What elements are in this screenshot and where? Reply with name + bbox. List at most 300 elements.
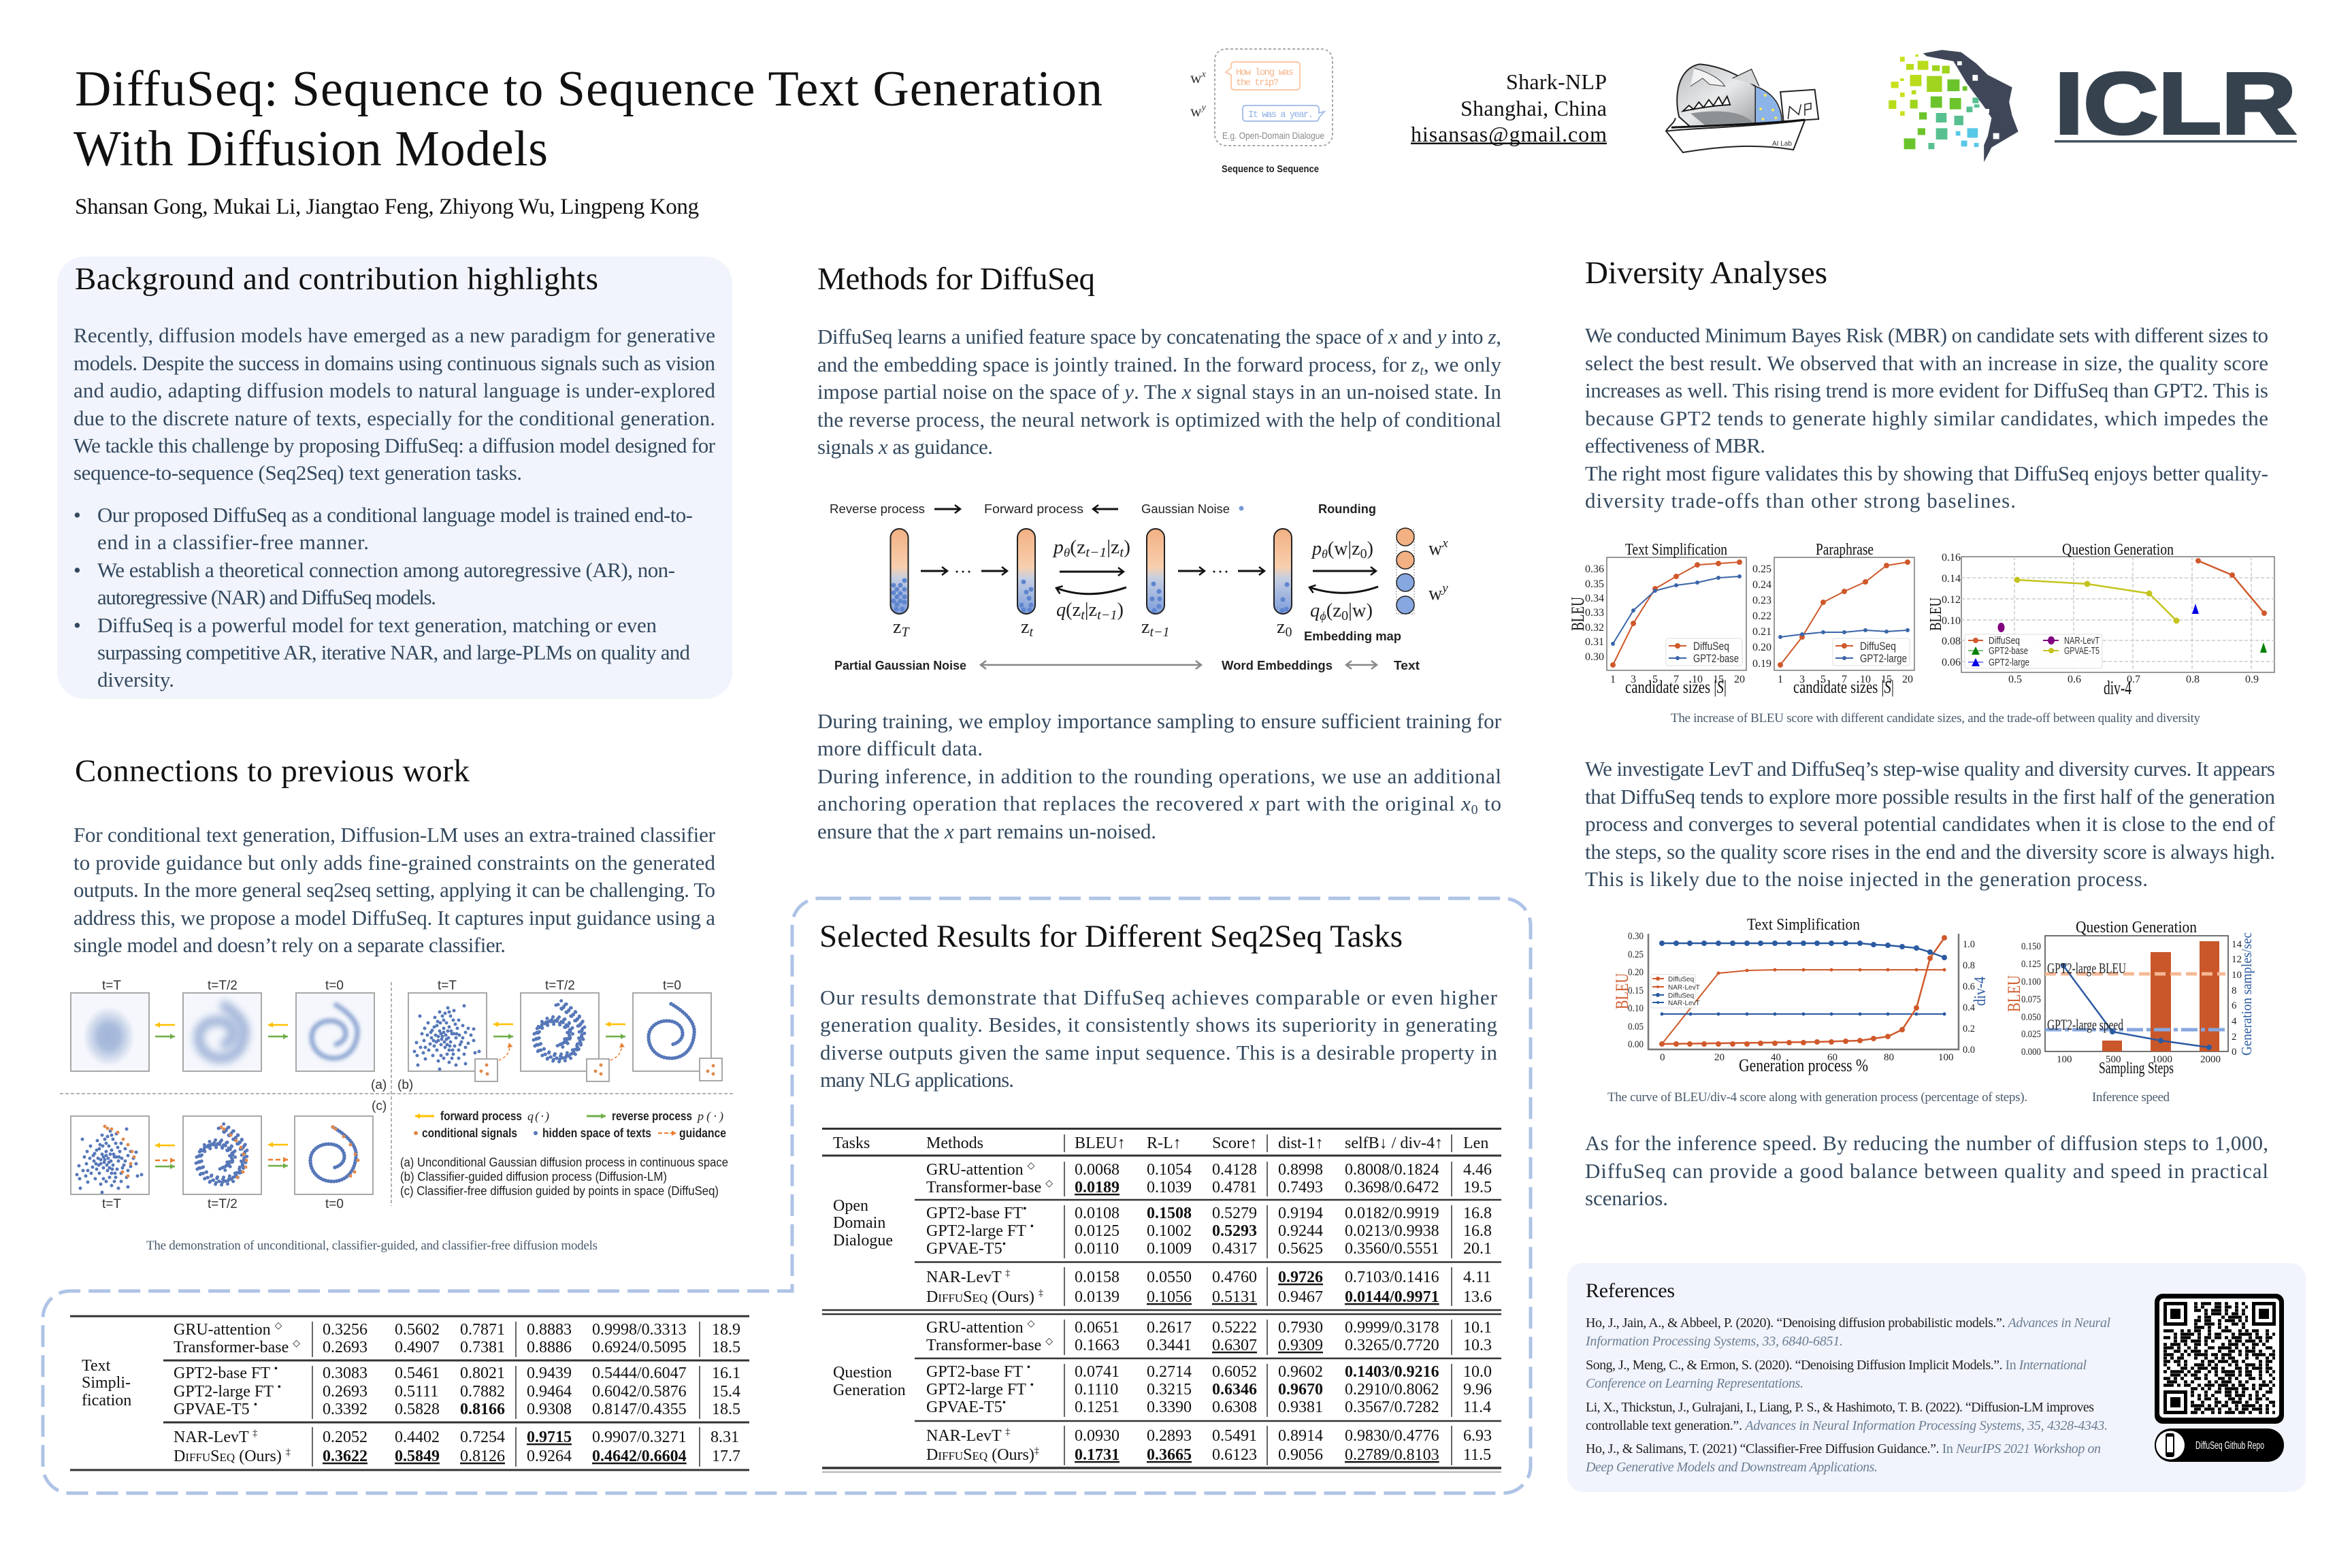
math labels: t−1 — [1097, 608, 1117, 623]
affiliation and contact: Shark-NLP — [1506, 69, 1607, 94]
table: text simplification: 0.9998/0.3313 — [592, 1321, 687, 1339]
stage labels: t=T/2 — [208, 979, 238, 993]
table header: Tasks — [833, 1134, 870, 1152]
table: text simplification: 0.9464 — [527, 1383, 572, 1401]
task: question generation: 0.1251 — [1075, 1399, 1120, 1416]
reference list: Ho, J., & Salimans, T. (2021) “Classifier-Free Diffusion Guidance.”. In NeurIPS 2021 Workshop on — [1586, 1441, 2101, 1456]
table: text simplification: 0.4642/0.6604 — [592, 1448, 687, 1465]
task: question generation: GRU-attention — [926, 1319, 1024, 1337]
figure caption: The demonstration of unconditional, classifier-guided, and classifier-free diffusion models — [146, 1239, 598, 1253]
task: open domain dialogue: Domain — [833, 1214, 885, 1232]
heading: diversity analyses: Diversity Analyses — [1585, 255, 1827, 291]
math labels: |z — [1085, 600, 1097, 621]
stage labels: (b) — [397, 1078, 413, 1092]
heading: selected results: Selected Results for Different Seq2Seq Tasks — [819, 919, 1403, 954]
table header: BLEU↑ — [1075, 1134, 1126, 1152]
chart: inference speed: 8 — [2232, 985, 2236, 996]
caption: candidate size figure: The increase of BLEU score with different candidate sizes, and the trade-off between quality and diversity — [1671, 711, 2201, 725]
chart: inference speed: 0 — [2232, 1047, 2236, 1058]
math labels: w — [1428, 538, 1442, 559]
text block: step-wise curves: the steps, so the quality score rises in the end and the diversity score is always high. — [1585, 840, 2275, 864]
chart: generation process curves: Text Simplification — [1747, 916, 1860, 934]
title: DiffuSeq: Sequence to Sequence Text Generation — [75, 61, 1102, 117]
chart: inference speed: 0.100 — [2021, 977, 2041, 987]
text block: MBR: effectiveness of MBR. — [1585, 434, 1765, 457]
chart: question generation trade-off: 0.5 — [2008, 674, 2022, 685]
task: open domain dialogue: 0.0125 — [1075, 1222, 1120, 1240]
authors: Shansan Gong, Mukai Li, Jiangtao Feng, Zhiyong Wu, Lingpeng Kong — [75, 195, 699, 219]
chart: question generation trade-off: 0.16 — [1942, 552, 1961, 564]
chart: inference speed: 14 — [2232, 939, 2242, 950]
figure: diffusion demonstration — [60, 979, 735, 1253]
table header: Len — [1463, 1134, 1488, 1152]
chart: generation process curves: NAR-LevT — [1668, 984, 1700, 992]
table: text simplification: 0.5111 — [395, 1383, 438, 1401]
chart: text simplification candidate sizes: 20 — [1734, 674, 1745, 685]
chart: inference speed: 0.150 — [2021, 941, 2041, 952]
task: question generation: 0.2910/0.8062 — [1345, 1381, 1439, 1399]
task: open domain dialogue: NAR-LevT — [926, 1269, 1001, 1286]
text block: step-wise curves: We investigate LevT and DiffuSeq’s step-wise quality and diversity curves. It appears — [1585, 757, 2275, 781]
task: question generation: 0.6123 — [1212, 1446, 1257, 1464]
icon: sequence to sequence card: E.g. Open-Domain Dialogue — [1222, 130, 1324, 141]
chart: generation process curves: div-4 — [1972, 977, 1989, 1006]
chart: paraphrase candidate sizes: 0.24 — [1752, 579, 1771, 591]
task: question generation: 0.5491 — [1212, 1427, 1257, 1445]
table: text simplification: 0.4907 — [395, 1339, 440, 1356]
logo: shark NLP — [1666, 64, 1818, 152]
captions: curve figures: Inference speed — [2092, 1090, 2170, 1105]
task: open domain dialogue: 0.0182/0.9919 — [1345, 1205, 1439, 1222]
chart: inference speed: 100 — [2057, 1054, 2072, 1065]
chart: paraphrase candidate sizes: 3 — [1799, 674, 1805, 685]
noise dots — [894, 581, 1287, 610]
task: open domain dialogue: Transformer-base — [926, 1179, 1041, 1196]
math labels: 0 — [1360, 546, 1367, 561]
task: question generation: 0.0741 — [1075, 1363, 1120, 1381]
row a: gaussian diffusion images — [71, 993, 374, 1071]
task: question generation: 11.4 — [1463, 1399, 1491, 1416]
chart: paraphrase candidate sizes: DiffuSeq — [1860, 640, 1896, 653]
figure legend — [400, 1109, 728, 1198]
chart: text simplification candidate sizes: DiffuSeq — [1693, 640, 1729, 653]
task: open domain dialogue: 0.1039 — [1147, 1179, 1192, 1196]
chart: question generation trade-off: GPVAE-T5 — [2064, 645, 2100, 657]
math labels: t — [1081, 608, 1085, 623]
task: question generation: 0.9381 — [1278, 1399, 1323, 1416]
heading: background: Background and contribution highlights — [75, 261, 598, 297]
chart: text simplification candidate sizes: 0.30 — [1585, 651, 1604, 663]
text block: background paragraph: Recently, diffusion models have emerged as a new paradigm for generative — [74, 323, 715, 347]
chart: question generation trade-off: 0.12 — [1942, 594, 1961, 606]
affiliation and contact: Shanghai, China — [1460, 96, 1607, 120]
chart: generation process curves: 40 — [1771, 1052, 1781, 1063]
divider lines — [60, 982, 735, 1206]
chart: paraphrase candidate sizes: 20 — [1902, 674, 1913, 685]
icon: sequence to sequence card: the trip? — [1236, 78, 1279, 88]
text block: MBR: The right most figure validates this by showing that DiffuSeq enjoys better quality- — [1585, 461, 2268, 485]
task: question generation: NAR-LevT — [926, 1427, 1001, 1445]
icon: sequence to sequence card: How long was — [1236, 67, 1294, 78]
math labels: p — [1052, 537, 1064, 558]
task: open domain dialogue: 0.8008/0.1824 — [1345, 1161, 1439, 1179]
text block: inference speed — [1585, 1131, 2268, 1210]
task: open domain dialogue: 19.5 — [1463, 1179, 1492, 1196]
text block: connections paragraph: single model and doesn’t rely on a separate classifier. — [74, 933, 506, 957]
math labels: t — [1120, 545, 1124, 560]
stage labels: t=T — [102, 1197, 121, 1211]
task: open domain dialogue: DiffuSeq (Ours) — [926, 1288, 1034, 1306]
table: text simplification: 0.9907/0.3271 — [592, 1428, 687, 1446]
task: question generation: 0.3567/0.7282 — [1345, 1399, 1439, 1416]
table: text simplification: • — [274, 1363, 278, 1375]
math labels: 0 — [1341, 608, 1348, 623]
captions: curve figures: The curve of BLEU/div-4 score along with generation process (percentage of steps). — [1607, 1090, 2027, 1105]
text block: background paragraph: due to the discrete nature of texts, especially for the conditional generation. — [74, 406, 715, 430]
stage labels: t=T — [102, 979, 121, 993]
chart: generation process curves: 0.6 — [1963, 981, 1975, 992]
table: text simplification: • — [254, 1399, 257, 1411]
chart: generation process curves: DiffuSeq — [1668, 992, 1694, 1000]
task: question generation: 0.1110 — [1075, 1381, 1118, 1399]
table: text simplification — [70, 1316, 749, 1470]
text block: background paragraph: and audio, adapting diffusion models to natural language is under-explored — [74, 378, 716, 402]
task: question generation: DiffuSeq (Ours) — [926, 1446, 1034, 1464]
chart: inference speed: GPT2-large speed — [2047, 1016, 2123, 1033]
task: open domain dialogue: 0.0108 — [1075, 1205, 1120, 1222]
text block: contribution bullets: We establish a theoretical connection among autoregressive (AR), non- — [97, 558, 675, 582]
chart: inference speed: 0.000 — [2021, 1047, 2041, 1058]
heading: references: References — [1586, 1279, 1675, 1302]
text block: results: Our results demonstrate that DiffuSeq achieves comparable or even higher — [820, 985, 1498, 1009]
chart: question generation trade-off: NAR-LevT — [2064, 635, 2100, 647]
table: text simplification: 0.3256 — [323, 1321, 368, 1339]
chart: text simplification candidate sizes: 7 — [1673, 674, 1679, 685]
text block: contribution bullets: diversity. — [97, 668, 174, 691]
task: open domain dialogue: 0.5279 — [1212, 1205, 1257, 1222]
table: text simplification: 0.4402 — [395, 1428, 440, 1446]
table: text simplification: 0.7254 — [460, 1428, 505, 1446]
stage labels: t=0 — [325, 1197, 344, 1211]
task: open domain dialogue: • — [1002, 1239, 1006, 1250]
reference list — [1585, 1316, 2110, 1475]
task: question generation: 0.0651 — [1075, 1319, 1120, 1337]
table header: Methods — [926, 1134, 983, 1152]
text block: methods intro: , we only — [1424, 353, 1501, 376]
figure legend: (b) Classifier-guided diffusion process (Diffusion-LM) — [400, 1170, 667, 1183]
text block: connections paragraph: to provide guidance but only adds fine-grained constraints on the generated — [74, 851, 716, 875]
text block: results: diverse outputs given the same input sequence. This is a desirable property in — [820, 1041, 1497, 1064]
task: open domain dialogue: 0.0110 — [1075, 1240, 1119, 1258]
button: DiffuSeq GitHub repo: DiffuSeq Github Repo — [2195, 1440, 2264, 1452]
math labels: z — [1277, 617, 1285, 638]
text block: inference speed: DiffuSeq can provide a good balance between quality and speed in practical — [1585, 1159, 2268, 1183]
task: question generation: 0.2714 — [1147, 1363, 1192, 1381]
task: open domain dialogue: 13.6 — [1463, 1288, 1492, 1306]
chart: paraphrase candidate sizes: 0.21 — [1752, 626, 1771, 638]
chart: inference speed: 4 — [2232, 1016, 2237, 1027]
table: text simplification: 0.5461 — [395, 1365, 440, 1382]
task: open domain dialogue: 0.9244 — [1278, 1222, 1323, 1240]
tubes — [890, 529, 1292, 614]
table: text simplification: 0.9439 — [527, 1365, 572, 1382]
chart: generation process curves: 80 — [1884, 1052, 1894, 1063]
figure legend: (c) Classifier-free diffusion guided by points in space (DiffuSeq) — [400, 1184, 719, 1198]
chart: inference speed: BLEU — [2004, 975, 2024, 1012]
table: text simplification: ◇ — [275, 1321, 282, 1331]
text block: background paragraph: models. Despite the success in domains using continuous signals such as vision — [74, 351, 716, 375]
task: open domain dialogue: 0.8998 — [1278, 1161, 1323, 1179]
task: open domain dialogue: ‡ — [1005, 1269, 1010, 1279]
table: text simplification: 18.5 — [712, 1401, 740, 1418]
table: main results — [822, 1128, 1501, 1472]
text block: contribution bullets: • — [74, 558, 81, 582]
task: question generation: 0.9670 — [1278, 1381, 1323, 1399]
table: text simplification: Simpli- — [82, 1374, 131, 1392]
row c: classifier-free scatter — [71, 1116, 373, 1194]
chart: generation process curves: 0 — [1660, 1052, 1665, 1063]
math labels: θ — [1322, 547, 1328, 561]
logo: ICLR: ICLR — [2055, 55, 2296, 152]
stage labels: (a) — [371, 1078, 387, 1092]
table: text simplification: 0.8883 — [527, 1321, 572, 1339]
chart: paraphrase candidate sizes: 0.22 — [1752, 610, 1771, 622]
title: With Diffusion Models — [74, 121, 548, 177]
chart: question generation trade-off: 0.7 — [2127, 674, 2140, 685]
task: open domain dialogue: 0.0213/0.9938 — [1345, 1222, 1439, 1240]
math labels: p — [1311, 538, 1322, 559]
task: question generation: 10.1 — [1463, 1319, 1492, 1337]
text block: background paragraph: sequence-to-sequence (Seq2Seq) text generation tasks. — [74, 461, 522, 485]
chart: text simplification candidate sizes: Text Simplification — [1625, 541, 1727, 559]
panel: references — [1567, 1263, 2306, 1492]
table header — [833, 1134, 1488, 1152]
text block: training and inference — [817, 709, 1502, 843]
logo: ICLR — [1889, 50, 2297, 162]
chart: inference speed: 10 — [2232, 970, 2242, 981]
table: text simplification: 8.31 — [710, 1428, 739, 1446]
table: text simplification: 0.7381 — [460, 1339, 505, 1356]
text block: contribution bullets: • — [74, 613, 81, 637]
table header: selfB↓ / div-4↑ — [1345, 1134, 1443, 1152]
task: question generation: ◇ — [1045, 1337, 1053, 1347]
table: text simplification: 0.8147/0.4355 — [592, 1401, 687, 1418]
chart: paraphrase candidate sizes: 1 — [1778, 674, 1783, 685]
table: text simplification: ‡ — [286, 1448, 291, 1458]
math labels: x — [1441, 536, 1448, 551]
chart: text simplification candidate sizes: 0.36 — [1585, 564, 1604, 575]
chart: generation process curves: 0.4 — [1963, 1002, 1975, 1013]
task: open domain dialogue: 0.0139 — [1075, 1288, 1120, 1306]
reference list: Conference on Learning Representations. — [1586, 1376, 1803, 1391]
text block: step-wise curves: This is likely due to the noise injected in the generation process. — [1585, 867, 2148, 891]
table header: R-L↑ — [1147, 1134, 1181, 1152]
math labels: ) — [1124, 537, 1130, 558]
chart: generation process curves: 60 — [1827, 1052, 1838, 1063]
task: question generation: • — [1027, 1362, 1030, 1373]
table: text simplification: ◇ — [293, 1339, 300, 1349]
math labels: t — [1029, 625, 1033, 640]
task: question generation: 0.5222 — [1212, 1319, 1257, 1337]
task: open domain dialogue: 0.7103/0.1416 — [1345, 1269, 1439, 1286]
table: text simplification: 0.7871 — [460, 1321, 505, 1339]
task: open domain dialogue: ◇ — [1045, 1179, 1053, 1189]
text block: contribution bullets — [74, 503, 693, 691]
icon: sequence to sequence card — [1190, 49, 1333, 175]
task: question generation: 0.3265/0.7720 — [1345, 1337, 1439, 1354]
table: text simplification: GPVAE-T5 — [174, 1401, 250, 1418]
chart: text simplification candidate sizes: 0.35 — [1585, 578, 1604, 590]
task: question generation: 0.9309 — [1278, 1337, 1323, 1354]
task: question generation: Generation — [833, 1382, 906, 1399]
bottom captions: Embedding map — [1304, 630, 1401, 643]
chart: inference speed: 2 — [2232, 1032, 2236, 1043]
chart: generation process curves: 0.0 — [1963, 1045, 1975, 1056]
step arrows — [921, 571, 1378, 594]
task: question generation: 0.8914 — [1278, 1427, 1323, 1445]
chart: paraphrase candidate sizes: 7 — [1842, 674, 1847, 685]
task: open domain dialogue: 4.11 — [1463, 1269, 1491, 1286]
chart: inference speed: Generation samples/sec — [2238, 932, 2255, 1056]
task: question generation: GPT2-large FT — [926, 1381, 1026, 1399]
table: text simplification: 0.2693 — [323, 1339, 368, 1356]
chart: generation process curves: Generation process % — [1739, 1056, 1868, 1075]
reference list: Information Processing Systems, 33, 6840-6851. — [1585, 1334, 1843, 1349]
chart: paraphrase candidate sizes: 0.20 — [1752, 642, 1771, 653]
reference list: Song, J., Meng, C., & Ermon, S. (2020). “Denoising Diffusion Implicit Models.”. In International — [1586, 1358, 2087, 1373]
task: question generation: 0.6308 — [1212, 1399, 1257, 1416]
chart: generation process curves: 20 — [1714, 1052, 1725, 1063]
chart: inference speed: Question Generation — [2076, 919, 2197, 936]
task: open domain dialogue: 0.1009 — [1147, 1240, 1192, 1258]
bottom captions — [834, 630, 1420, 672]
text block: results: generation quality. Besides, it consistently shows its superiority in generating — [820, 1013, 1497, 1036]
table: text simplification: 0.3622 — [323, 1448, 368, 1465]
reference list: controllable text generation.”. Advances in Neural Information Processing Systems, 35, 4328-4343. — [1586, 1418, 2108, 1433]
diagram legend row — [830, 502, 1376, 516]
task: open domain dialogue: 0.5131 — [1212, 1288, 1257, 1306]
button: DiffuSeq GitHub repo — [2155, 1428, 2284, 1462]
text block: methods intro — [817, 325, 1501, 459]
bottom captions: Text — [1394, 659, 1420, 672]
task: open domain dialogue: GPT2-base FT — [926, 1205, 1023, 1222]
math labels: z — [893, 617, 901, 638]
chart: paraphrase candidate sizes: candidate sizes |S| — [1793, 677, 1894, 697]
task: open domain dialogue: GPT2-large FT — [926, 1222, 1026, 1240]
figure legend: conditional signals — [422, 1126, 517, 1140]
task: question generation: 0.1403/0.9216 — [1345, 1363, 1439, 1381]
chart: paraphrase candidate sizes: 0.19 — [1752, 658, 1771, 670]
table: text simplification: 0.3392 — [323, 1401, 368, 1418]
table header: dist-1↑ — [1278, 1134, 1324, 1152]
math labels — [893, 536, 1448, 640]
table: text simplification: 0.6924/0.5095 — [592, 1339, 687, 1356]
task: question generation: GPVAE-T5 — [926, 1399, 1002, 1416]
task: question generation: 0.3215 — [1147, 1381, 1192, 1399]
chart: paraphrase candidate sizes — [1752, 541, 1914, 697]
task: open domain dialogue: 0.1002 — [1147, 1222, 1192, 1240]
diagram: diffusion process — [830, 502, 1448, 672]
chart: generation process curves: 0.10 — [1628, 1003, 1644, 1014]
table: text simplification: fication — [82, 1392, 131, 1409]
task: question generation — [833, 1319, 1492, 1464]
task: question generation: 0.0930 — [1075, 1427, 1120, 1445]
icon: sequence to sequence card: It was a year. — [1248, 110, 1313, 120]
task: question generation: GPT2-base FT — [926, 1363, 1023, 1381]
task: question generation: 0.2789/0.8103 — [1345, 1446, 1439, 1464]
embedding circles — [1396, 528, 1414, 614]
chart: generation process curves: BLEU — [1612, 973, 1632, 1009]
task: question generation: 0.6052 — [1212, 1363, 1257, 1381]
chart: question generation trade-off: GPT2-large — [1989, 657, 2029, 668]
table: text simplification: 0.8021 — [460, 1365, 505, 1382]
task: open domain dialogue: 4.46 — [1463, 1161, 1492, 1179]
chart: inference speed: 500 — [2106, 1054, 2121, 1065]
chart: inference speed: 2000 — [2200, 1054, 2221, 1065]
text block: contribution bullets: DiffuSeq is a powerful model for text generation, matching or even — [97, 613, 657, 637]
math labels: ) — [1367, 538, 1373, 559]
chart: question generation trade-off: 0.8 — [2186, 674, 2200, 685]
task: question generation: Question — [833, 1364, 892, 1382]
text block: training and inference: to — [1478, 791, 1501, 815]
table: text simplification: 18.9 — [712, 1321, 740, 1339]
task: open domain dialogue: GPVAE-T5 — [926, 1240, 1002, 1258]
diagram legend row: Rounding — [1318, 502, 1376, 516]
text block: MBR: We conducted Minimum Bayes Risk (MBR) on candidate sets with different sizes to — [1585, 323, 2268, 347]
text block: background paragraph: We tackle this challenge by proposing DiffuSeq: a diffusion model designed for — [74, 434, 716, 457]
text block: MBR — [1585, 323, 2268, 512]
task: question generation: 0.3665 — [1147, 1446, 1192, 1464]
text block: training and inference: ensure that the x part remains un-noised. — [817, 819, 1156, 843]
task: open domain dialogue: 16.8 — [1463, 1205, 1492, 1222]
task: open domain dialogue: 0.4760 — [1212, 1269, 1257, 1286]
math labels: q(z — [1056, 600, 1081, 621]
stage labels: t=T/2 — [545, 979, 575, 993]
stage labels: t=0 — [325, 979, 344, 993]
chart: generation process curves: 1.0 — [1963, 939, 1975, 950]
affiliation and contact: hisansas@gmail.com — [1411, 122, 1607, 146]
text block: methods intro: t — [1420, 363, 1424, 378]
task: question generation: 0.9602 — [1278, 1363, 1323, 1381]
shark badge text: AI Lab — [1772, 140, 1792, 148]
task: question generation: 0.2893 — [1147, 1427, 1192, 1445]
reference list: Ho, J., Jain, A., & Abbeel, P. (2020). “Denoising diffusion probabilistic models.”. Advances in Neural — [1586, 1316, 2110, 1330]
figure legend: p(·) — [696, 1109, 723, 1124]
text block: MBR: because GPT2 tends to generate highly similar candidates, which impedes the — [1585, 406, 2268, 430]
chart: question generation trade-off: div-4 — [2104, 678, 2132, 699]
chart: generation process curves: DiffuSeq — [1668, 976, 1694, 983]
icon: sequence to sequence card: Sequence to Sequence — [1222, 163, 1319, 175]
chart: generation process curves: 0.8 — [1963, 960, 1975, 971]
chart: question generation trade-off: BLEU — [1927, 598, 1945, 631]
task: question generation: 6.93 — [1463, 1427, 1492, 1445]
chart: paraphrase candidate sizes: GPT2-large — [1860, 652, 1907, 665]
chart: inference speed: 0.025 — [2021, 1029, 2041, 1040]
table: text simplification: 15.4 — [712, 1383, 740, 1401]
text block: step-wise curves: that DiffuSeq tends to explore more possible results in the first half of the generation — [1585, 785, 2276, 808]
task: open domain dialogue: 0.4317 — [1212, 1240, 1257, 1258]
math labels: z — [1021, 617, 1029, 638]
chart: generation process curves — [1612, 916, 1989, 1075]
task: open domain dialogue: 0.0068 — [1075, 1161, 1120, 1179]
chart: generation process curves: 100 — [1938, 1052, 1953, 1063]
task: question generation: 10.3 — [1463, 1337, 1492, 1354]
figure legend: q(·) — [527, 1109, 549, 1124]
task: open domain dialogue: 0.5293 — [1212, 1222, 1257, 1240]
chart: inference speed: 12 — [2232, 954, 2242, 965]
reference list: Deep Generative Models and Downstream Applications. — [1585, 1460, 1878, 1475]
task: open domain dialogue: GRU-attention — [926, 1161, 1024, 1179]
